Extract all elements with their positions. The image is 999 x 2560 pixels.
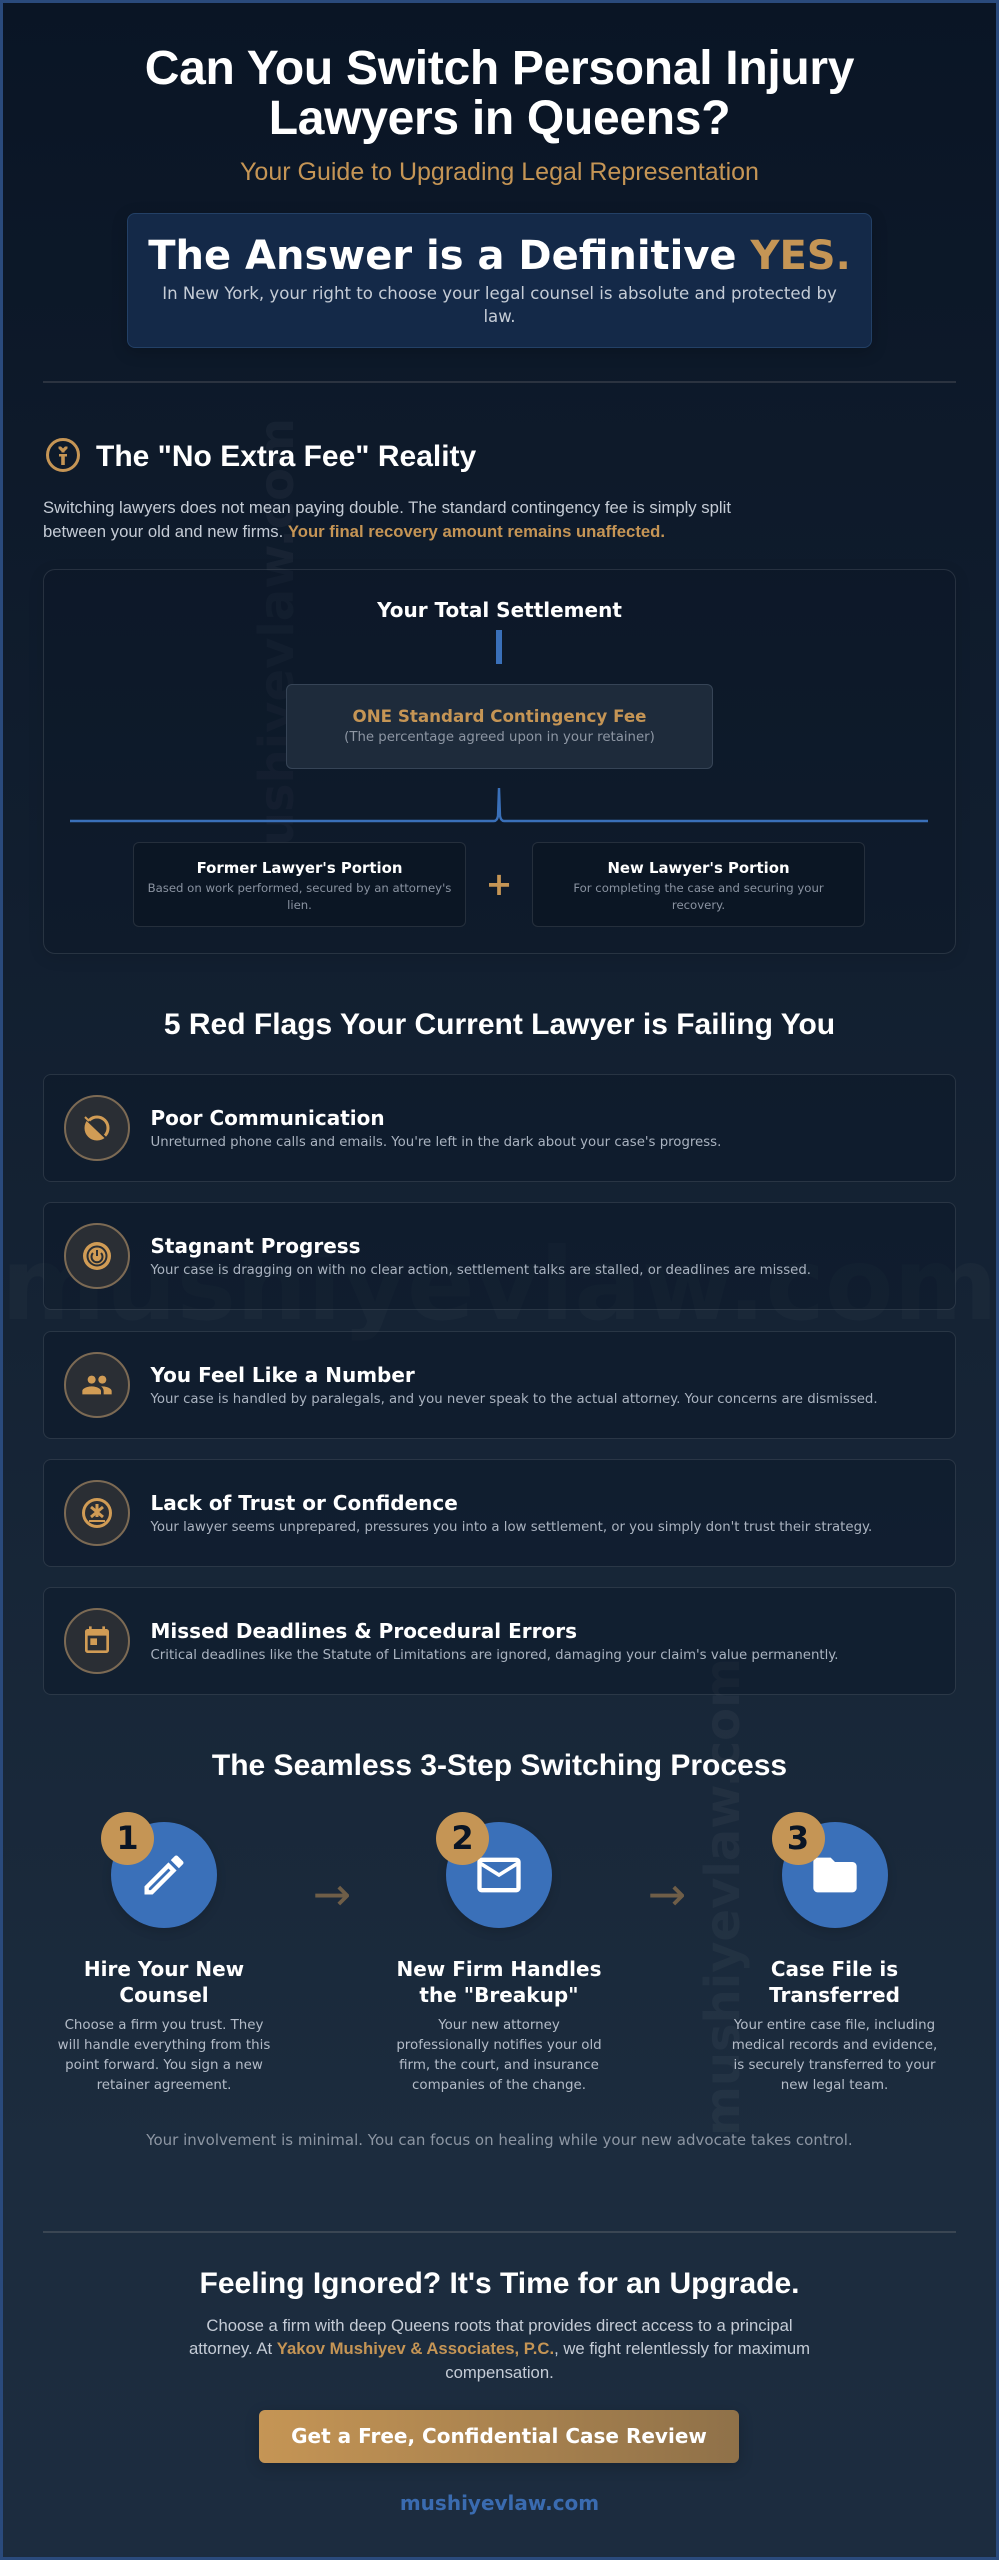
icon: phone off: [64, 1095, 130, 1161]
watermark: vertical upper: mushiyevlaw.com: [249, 418, 305, 896]
description: Your case is dragging on with no clear action, settlement talks are stalled, or deadlines are missed.: [150, 1262, 811, 1278]
step 3 text: Your entire case file, including medical records and evidence, is securely transferred to your new legal team.: [732, 2018, 937, 2093]
title: You Feel Like a Number: [150, 1363, 415, 1387]
description: Critical deadlines like the Statute of Limitations are ignored, damaging your claim's value permanently.: [150, 1648, 838, 1662]
divider: [43, 381, 956, 383]
heading: process: The Seamless 3-Step Switching Process: [212, 1749, 787, 1782]
card: poor communication: [43, 1074, 956, 1182]
title: Can You Switch Personal Injury: [145, 42, 854, 95]
settlement heading: Your Total Settlement: [377, 598, 622, 622]
subtitle: Your Guide to Upgrading Legal Representation: [240, 158, 759, 186]
card: lack of trust: [43, 1459, 956, 1567]
step 1: [58, 1812, 270, 2093]
step 2: [396, 1812, 602, 2093]
card: feel like a number: [43, 1331, 956, 1439]
step 1 circle with pencil icon: [111, 1822, 217, 1928]
plus sign: +: [486, 865, 512, 903]
website link: mushiyevlaw.com: [400, 2491, 599, 2515]
badge 3: [772, 1812, 824, 1865]
bracket connector: [70, 788, 928, 822]
heading: no extra fee: The "No Extra Fee" Reality: [96, 440, 476, 473]
step 3: [732, 1812, 937, 2093]
new text: For completing the case and securing your recovery.: [573, 881, 824, 912]
box: former lawyer: [133, 842, 466, 927]
answer heading: The Answer is a Definitive YES.: [148, 233, 851, 279]
process note: Your involvement is minimal. You can focus on healing while your new advocate takes control.: [146, 2131, 853, 2149]
icon: people: [64, 1352, 130, 1418]
card: stagnant progress: [43, 1202, 956, 1310]
arrow 1: →: [313, 1867, 351, 1921]
step 2 title: New Firm Handles the "Breakup": [396, 1957, 602, 2007]
button: [259, 2410, 739, 2463]
icon: power ring: [64, 1223, 130, 1289]
step 3 circle with folder icon: [782, 1822, 888, 1928]
former text: Based on work performed, secured by an attorney's lien.: [148, 881, 451, 912]
step 3 title: Case File is Transferred: [769, 1957, 900, 2007]
title: Lawyers in Queens?: [269, 92, 730, 145]
description: Your case is handled by paralegals, and you never speak to the actual attorney. Your concerns are dismissed.: [150, 1392, 878, 1406]
arrow 2: →: [648, 1867, 686, 1921]
new title: New Lawyer's Portion: [607, 859, 790, 877]
button: Get a Free, Confidential Case Review: [291, 2424, 707, 2448]
step 1 text: Choose a firm you trust. They will handle everything from this point forward. You sign a new retainer agreement.: [58, 2018, 270, 2093]
fee note: (The percentage agreed upon in your retainer): [344, 730, 655, 745]
badge 2: 2: [451, 1819, 474, 1857]
badge 1: [101, 1812, 154, 1865]
panel: answer callout: [127, 213, 872, 348]
former title: Former Lawyer's Portion: [197, 859, 402, 877]
badge 2: [436, 1812, 489, 1865]
step 1 title: Hire Your New Counsel: [84, 1957, 244, 2007]
title: Lack of Trust or Confidence: [150, 1491, 458, 1515]
box: new lawyer: [532, 842, 865, 927]
description: Unreturned phone calls and emails. You're left in the dark about your case's progress.: [150, 1134, 721, 1150]
step 2 circle with mail icon: [446, 1822, 552, 1928]
title: Missed Deadlines & Procedural Errors: [150, 1619, 577, 1643]
badge 3: 3: [787, 1819, 809, 1857]
watermark: vertical lower: mushiyevlaw.com: [695, 1658, 751, 2136]
title: Stagnant Progress: [150, 1234, 361, 1258]
panel: settlement diagram: [43, 569, 956, 954]
heading: call to action: Feeling Ignored? It's Time for an Upgrade.: [200, 2267, 800, 2300]
icon: trust crossed: [64, 1480, 130, 1546]
answer text: In New York, your right to choose your legal counsel is absolute and protected by law.: [162, 284, 837, 326]
fee title: ONE Standard Contingency Fee: [353, 706, 646, 726]
badge 1: 1: [116, 1819, 139, 1857]
title: Poor Communication: [150, 1106, 385, 1130]
heading: red flags: 5 Red Flags Your Current Lawyer is Failing You: [164, 1008, 835, 1041]
intro paragraph: Switching lawyers does not mean paying double. The standard contingency fee is simply split between your old and new firms. Your final recovery amount remains unaffected.: [43, 498, 731, 540]
icon: info: [46, 438, 80, 472]
card: missed deadlines: [43, 1587, 956, 1695]
divider: [43, 2231, 956, 2233]
cta paragraph: Choose a firm with deep Queens roots that provides direct access to a principal attorney. At Yakov Mushiyev & Associates, P.C., we fight relentlessly for maximum compensation.: [189, 2316, 810, 2382]
description: Your lawyer seems unprepared, pressures you into a low settlement, or you simply don't trust their strategy.: [150, 1520, 872, 1534]
watermark: horizontal: mushiyevlaw.com: [1, 1226, 998, 1343]
step 2 text: Your new attorney professionally notifies your old firm, the court, and insurance companies of the change.: [396, 2018, 602, 2093]
title: [145, 42, 854, 145]
connector bar: [496, 630, 502, 664]
fee box: [286, 684, 713, 769]
icon: calendar: [64, 1608, 130, 1674]
